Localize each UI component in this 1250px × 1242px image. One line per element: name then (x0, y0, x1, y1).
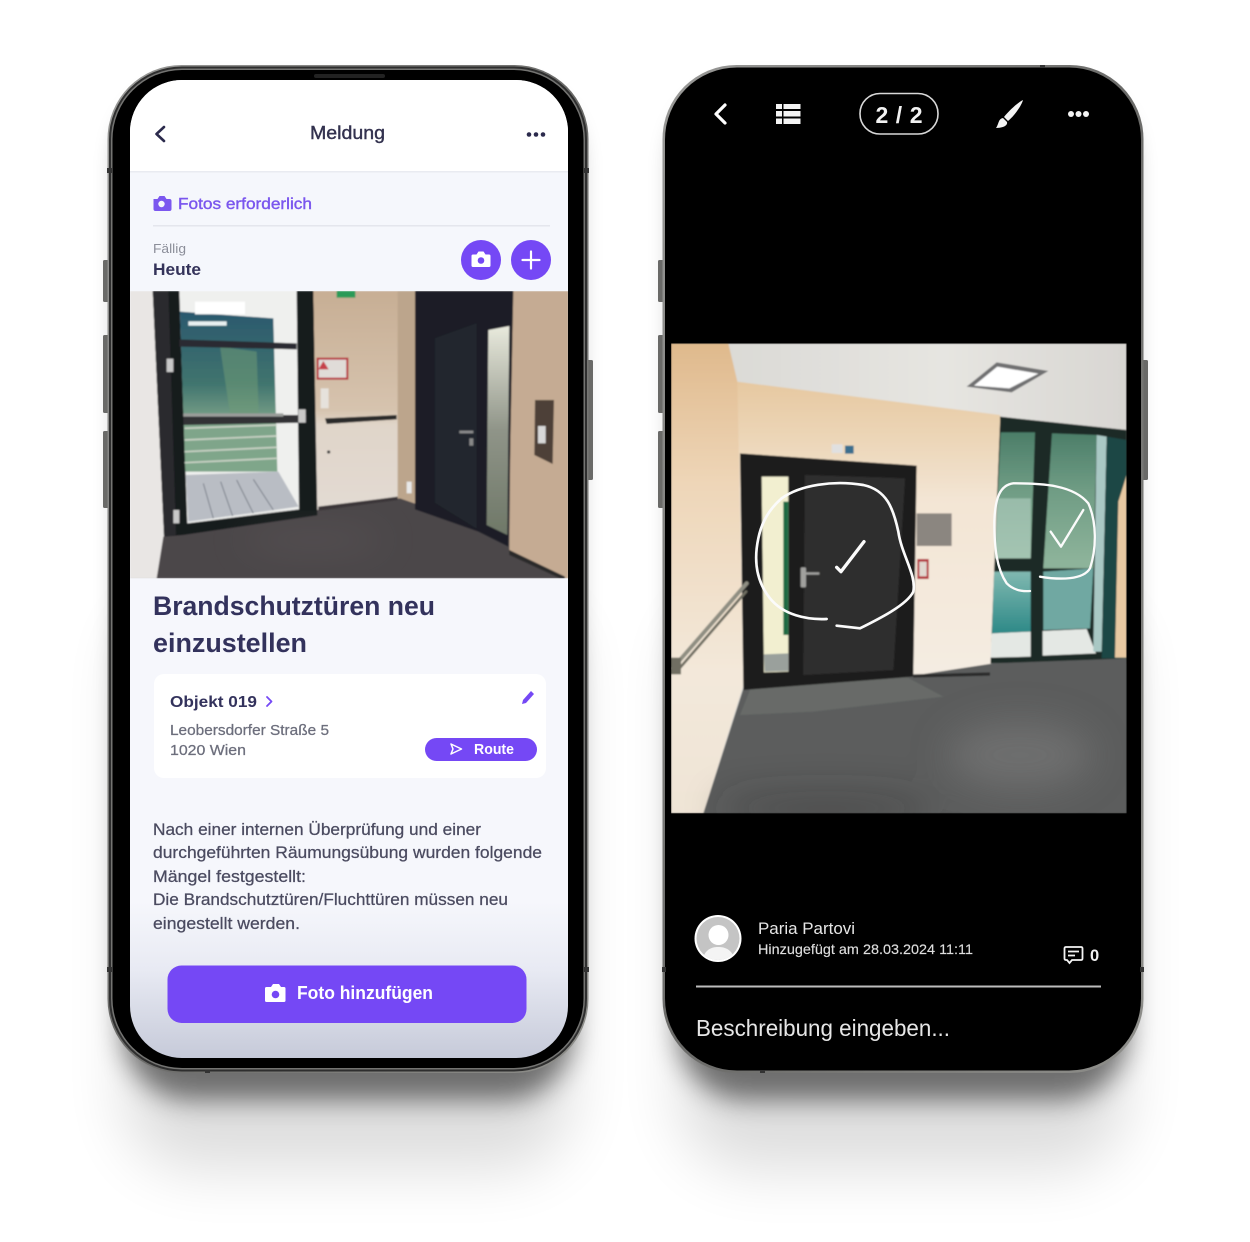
description text: Mängel festgestellt: (153, 868, 306, 886)
toolbar (716, 94, 1089, 134)
icon: camera small (154, 196, 172, 211)
phone shadows (122, 90, 1129, 1170)
button: camera round (461, 240, 501, 280)
address (171, 724, 328, 756)
icon: comment count (1064, 947, 1099, 965)
floor sheen (748, 722, 1084, 812)
icon: brush (996, 100, 1023, 128)
icon: back chevron (716, 105, 725, 123)
icon: more dots (527, 132, 545, 137)
object card (154, 674, 546, 778)
add photo button (168, 966, 526, 1023)
floor sheen (240, 527, 387, 553)
icon: camera (265, 984, 286, 1002)
add photo button: Foto hinzufügen (297, 983, 433, 1003)
drawn circle and check on door (756, 483, 914, 628)
page counter (860, 94, 938, 134)
address: Leobersdorfer Straße 5 (170, 723, 329, 739)
icon: object chevron (267, 697, 272, 706)
phone right (658, 65, 1148, 1073)
phone body right (662, 65, 1144, 1073)
page counter: 2 / 2 (876, 102, 922, 128)
infographic: two phone mockups (98, 65, 1154, 1188)
side buttons left phone (103, 260, 593, 508)
icon: back chevron (156, 127, 164, 141)
description text (153, 821, 542, 933)
icon: user avatar (694, 915, 742, 964)
header title: Meldung (310, 123, 385, 143)
object name: Objekt 019 (170, 694, 257, 711)
description text: Nach einer internen Überprüfung und einer (153, 821, 482, 839)
address: 1020 Wien (170, 743, 246, 759)
description text: Die Brandschutztüren/Fluchttüren müssen neu (153, 891, 508, 909)
drawn circle and check on window (994, 483, 1095, 591)
description text: eingestellt werden. (153, 915, 300, 933)
app header (130, 80, 568, 172)
route button (425, 738, 537, 761)
author name: Paria Partovi (758, 920, 855, 938)
report title (154, 596, 434, 652)
icon: list (776, 104, 800, 124)
icon: edit pencil (522, 691, 534, 704)
photo: door with white check marks (671, 343, 1127, 822)
icon: comment count: 0 (1090, 947, 1099, 965)
button: plus round (511, 240, 551, 280)
added date: Hinzugefügt am 28.03.2024 11:11 (758, 941, 973, 957)
route button: Route (474, 742, 514, 758)
phone body left (107, 65, 589, 1073)
description placeholder: Beschreibung eingeben... (696, 1015, 950, 1041)
phone left (103, 65, 593, 1073)
due label: Fällig (153, 242, 186, 256)
photos required label: Fotos erforderlich (178, 196, 312, 213)
side buttons right phone (658, 260, 1148, 508)
due value: Heute (153, 260, 201, 279)
screen left (130, 80, 568, 1058)
report title: Brandschutztüren neu (153, 591, 435, 621)
description text: durchgeführten Räumungsübung wurden folgende (153, 844, 542, 862)
icon: more dots (1068, 111, 1089, 117)
report title: einzustellen (153, 628, 307, 658)
photo: corridor with glass door (130, 291, 568, 578)
